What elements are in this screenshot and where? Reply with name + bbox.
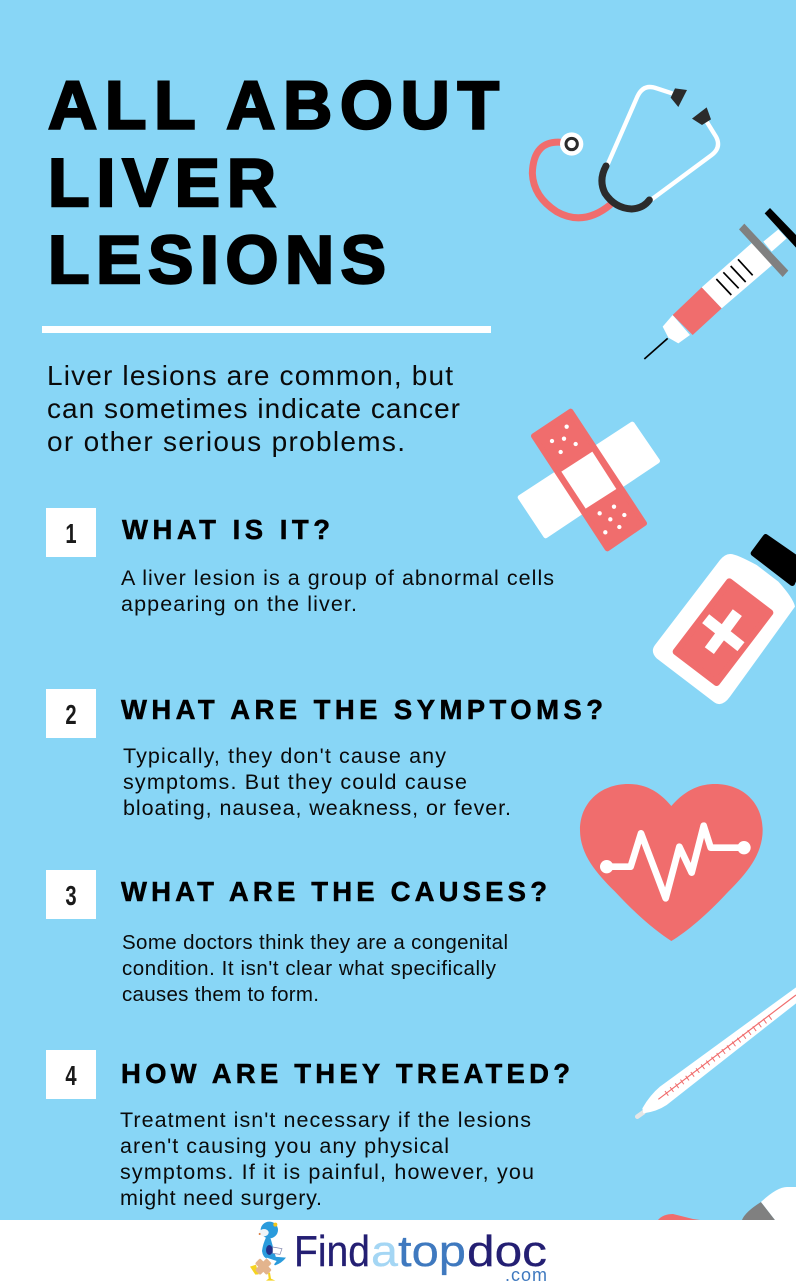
section 3: causes: 3 — [65, 881, 77, 912]
icon: medicine bottle — [653, 537, 796, 704]
section 3: causes: causes them to form. — [122, 983, 319, 1006]
section 2: symptoms: 2 — [65, 700, 77, 731]
section 4: treatment: HOW ARE THEY TREATED? — [121, 1058, 570, 1089]
section 4: treatment: might need surgery. — [120, 1186, 322, 1210]
icon: heart with pulse — [580, 784, 763, 941]
section 2: symptoms: Typically, they don't cause any — [123, 744, 446, 768]
logo: findatopdoc — [250, 1222, 547, 1284]
section 4: treatment: 4 — [65, 1061, 77, 1092]
section 4: treatment: Treatment isn't necessary if the lesions — [120, 1108, 531, 1132]
title rule — [42, 326, 491, 333]
section 2: symptoms: WHAT ARE THE SYMPTOMS? — [121, 694, 603, 725]
section 2: symptoms: bloating, nausea, weakness, or fever. — [123, 796, 511, 820]
section 2: symptoms — [46, 689, 603, 820]
intro text: Liver lesions are common, but — [47, 360, 453, 391]
icon: cropped medical items at bottom edge — [658, 1187, 796, 1220]
intro text: can sometimes indicate cancer — [47, 393, 460, 424]
section 1: what is it: A liver lesion is a group of abnormal cells — [121, 566, 554, 590]
title — [48, 68, 499, 298]
section 3: causes — [46, 870, 547, 1006]
logo: findatopdoc: a — [371, 1227, 399, 1276]
icon: syringe — [644, 208, 796, 359]
section 4: treatment: aren't causing you any physical — [120, 1134, 449, 1158]
logo: findatopdoc: top — [398, 1227, 466, 1276]
section 4: treatment: symptoms. If it is painful, however, you — [120, 1160, 534, 1184]
section 3: causes: WHAT ARE THE CAUSES? — [121, 876, 547, 907]
section 3: causes: condition. It isn't clear what specifically — [122, 957, 497, 980]
section 2: symptoms: symptoms. But they could cause — [123, 770, 467, 794]
intro text: or other serious problems. — [47, 426, 405, 457]
icon: bandage — [520, 411, 658, 549]
section 1: what is it: 1 — [65, 519, 77, 550]
footer band — [0, 1220, 796, 1284]
section 4: treatment — [46, 1050, 570, 1210]
title: LIVER — [48, 145, 276, 221]
logo: findatopdoc: doc — [467, 1227, 547, 1276]
intro text — [47, 360, 460, 457]
section 1: what is it: appearing on the liver. — [121, 592, 357, 616]
logo: findatopdoc: Find — [294, 1227, 370, 1276]
logo bird — [250, 1222, 286, 1281]
section 3: causes: Some doctors think they are a congenital — [122, 931, 508, 954]
icon: stethoscope — [532, 87, 718, 218]
title: ALL ABOUT — [48, 68, 499, 144]
section 1: what is it: WHAT IS IT? — [122, 514, 330, 545]
icon: thermometer — [637, 987, 796, 1117]
section 1: what is it — [46, 508, 554, 616]
title: LESIONS — [48, 222, 386, 298]
